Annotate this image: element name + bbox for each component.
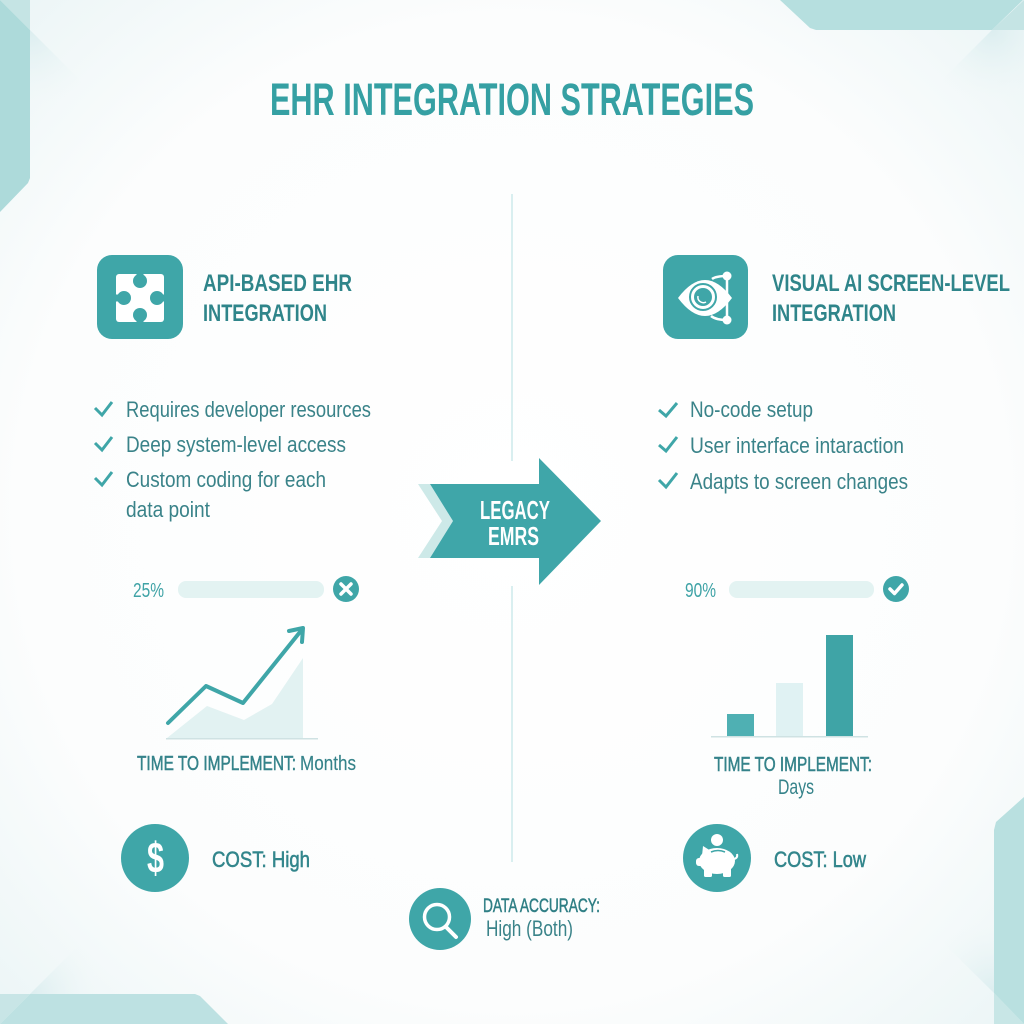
cost: high: $ — [147, 834, 164, 883]
list: API features: Custom coding for each — [126, 467, 326, 492]
label: time to implement days — [714, 754, 872, 799]
list: Visual AI features — [659, 397, 908, 494]
list: Visual AI features: User interface intaraction — [690, 433, 904, 458]
list: API features: data point — [126, 497, 210, 522]
title: EHR INTEGRATION STRATEGIES — [270, 74, 754, 125]
label: time to implement days: Days — [778, 776, 814, 799]
corner accent: bottom left — [0, 994, 228, 1024]
heading: Visual AI integration — [772, 270, 1010, 327]
corner accent: top left — [0, 0, 30, 212]
progress: 25% — [133, 576, 359, 602]
cost: low: COST: Low — [774, 847, 866, 872]
icon: piggy bank — [696, 834, 737, 877]
heading: API-based EHR integration — [203, 270, 352, 327]
cost: high: COST: High — [212, 847, 310, 872]
arrow: legacy EMRs — [418, 458, 601, 585]
data accuracy: High (Both) — [486, 916, 573, 941]
line chart: rising implementation time — [166, 628, 318, 740]
list: API features: Deep system-level access — [126, 432, 346, 457]
cost: low — [683, 824, 866, 892]
list: API features: Requires developer resources — [126, 397, 371, 422]
bar chart: implementation time — [711, 635, 868, 738]
icon: AI eye — [663, 255, 748, 339]
progress: 90% — [685, 576, 909, 602]
progress: 25%: 25% — [133, 580, 164, 602]
arrow: legacy EMRs: EMRS — [488, 521, 539, 551]
heading: API-based EHR integration: API-BASED EHR — [203, 270, 352, 297]
panel: Visual AI screen-level integration — [659, 255, 1010, 892]
corner accent: top right — [780, 0, 1024, 30]
data accuracy — [409, 888, 600, 950]
icon: puzzle piece — [97, 255, 183, 339]
label: time to implement months: Months — [300, 753, 356, 775]
list: Visual AI features: Adapts to screen changes — [690, 469, 908, 494]
corner accent: bottom right — [994, 797, 1024, 1024]
list: API features — [95, 397, 371, 522]
label: time to implement days: TIME TO IMPLEMENT: — [714, 754, 872, 776]
progress: 90%: 90% — [685, 580, 716, 602]
list: Visual AI features: No-code setup — [690, 397, 813, 422]
center divider — [511, 194, 513, 862]
label: time to implement months: TIME TO IMPLEMENT: — [137, 753, 296, 775]
heading: API-based EHR integration: INTEGRATION — [203, 300, 327, 327]
data accuracy: DATA ACCURACY: — [483, 896, 600, 917]
cost: high — [121, 824, 310, 892]
heading: Visual AI integration: INTEGRATION — [772, 300, 896, 327]
arrow: legacy EMRs: LEGACY — [480, 495, 550, 525]
panel: API-based EHR integration — [95, 255, 371, 892]
